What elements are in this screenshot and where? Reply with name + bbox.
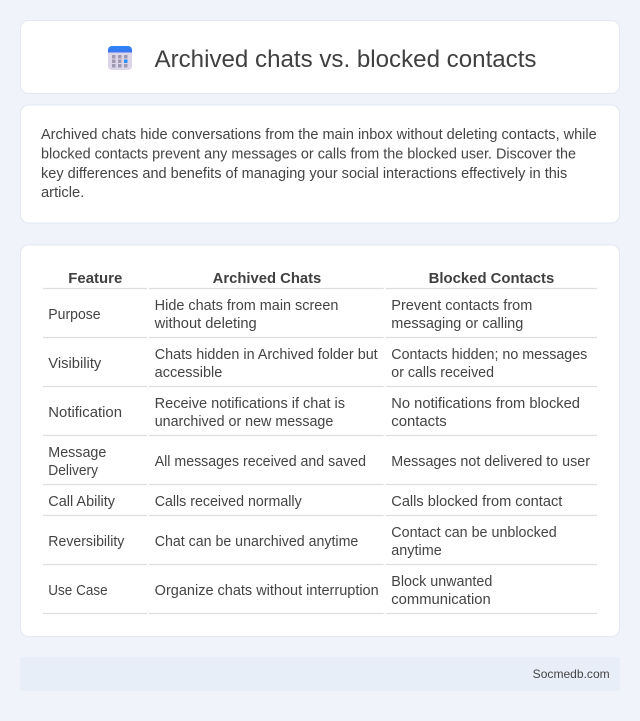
row: visibility: Chats hidden in Archived folder but	[155, 347, 378, 363]
table header	[68, 271, 554, 287]
table header: Blocked Contacts	[429, 271, 554, 287]
title: Archived chats vs. blocked contacts	[154, 46, 536, 73]
table header: Feature	[68, 271, 122, 287]
row: message delivery: All messages received and saved	[155, 454, 366, 470]
row: message delivery	[48, 445, 590, 479]
row: visibility: Contacts hidden; no messages	[391, 347, 587, 363]
row: reversibility: anytime	[391, 543, 442, 559]
row: call ability	[48, 494, 562, 510]
row: purpose: Prevent contacts from	[391, 298, 532, 314]
row: notification: contacts	[391, 414, 447, 430]
row: purpose: without deleting	[154, 316, 257, 332]
row: notification: unarchived or new message	[155, 414, 333, 430]
intro text: Archived chats hide conversations from the main inbox without deleting contacts, while	[41, 127, 597, 143]
row: notification: Notification	[48, 405, 122, 421]
row: notification: Receive notifications if chat is	[155, 396, 345, 412]
row: visibility	[48, 347, 587, 381]
intro text: key differences and benefits of managing your social interactions effectively in this	[41, 166, 567, 182]
row: use case: communication	[391, 592, 491, 608]
row: use case: Use Case	[48, 583, 108, 599]
intro text: blocked contacts prevent any messages or calls from the blocked user. Discover the	[41, 146, 576, 162]
row: call ability: Calls received normally	[155, 494, 302, 510]
row: use case: Block unwanted	[391, 574, 492, 590]
row: message delivery: Messages not delivered to user	[391, 454, 590, 470]
panel: comparison table	[20, 245, 620, 636]
row: purpose	[48, 298, 532, 332]
row: visibility: accessible	[155, 365, 222, 381]
footer: Socmedb.com	[533, 667, 610, 681]
row: notification	[48, 396, 580, 430]
row: use case: Organize chats without interruption	[155, 583, 379, 599]
footer	[20, 657, 620, 691]
table header: Archived Chats	[213, 271, 321, 287]
row: purpose: messaging or calling	[391, 316, 523, 332]
intro text: article.	[41, 185, 84, 201]
row: purpose: Hide chats from main screen	[155, 298, 338, 314]
row: visibility: or calls received	[391, 365, 494, 381]
row: reversibility	[48, 525, 557, 559]
icon: calendar	[108, 46, 132, 70]
row: purpose: Purpose	[48, 307, 101, 323]
row: message delivery: Delivery	[48, 463, 99, 479]
intro text	[41, 127, 597, 201]
row: visibility: Visibility	[48, 356, 102, 372]
row: notification: No notifications from blocked	[391, 396, 580, 412]
row: reversibility: Chat can be unarchived anytime	[155, 534, 358, 550]
row: use case	[48, 574, 492, 608]
row: message delivery: Message	[48, 445, 106, 461]
row: call ability: Calls blocked from contact	[391, 494, 562, 510]
row: reversibility: Reversibility	[48, 534, 125, 550]
row: reversibility: Contact can be unblocked	[391, 525, 557, 541]
row: call ability: Call Ability	[48, 494, 116, 510]
panel: header	[20, 20, 620, 94]
panel: introduction	[20, 105, 620, 223]
